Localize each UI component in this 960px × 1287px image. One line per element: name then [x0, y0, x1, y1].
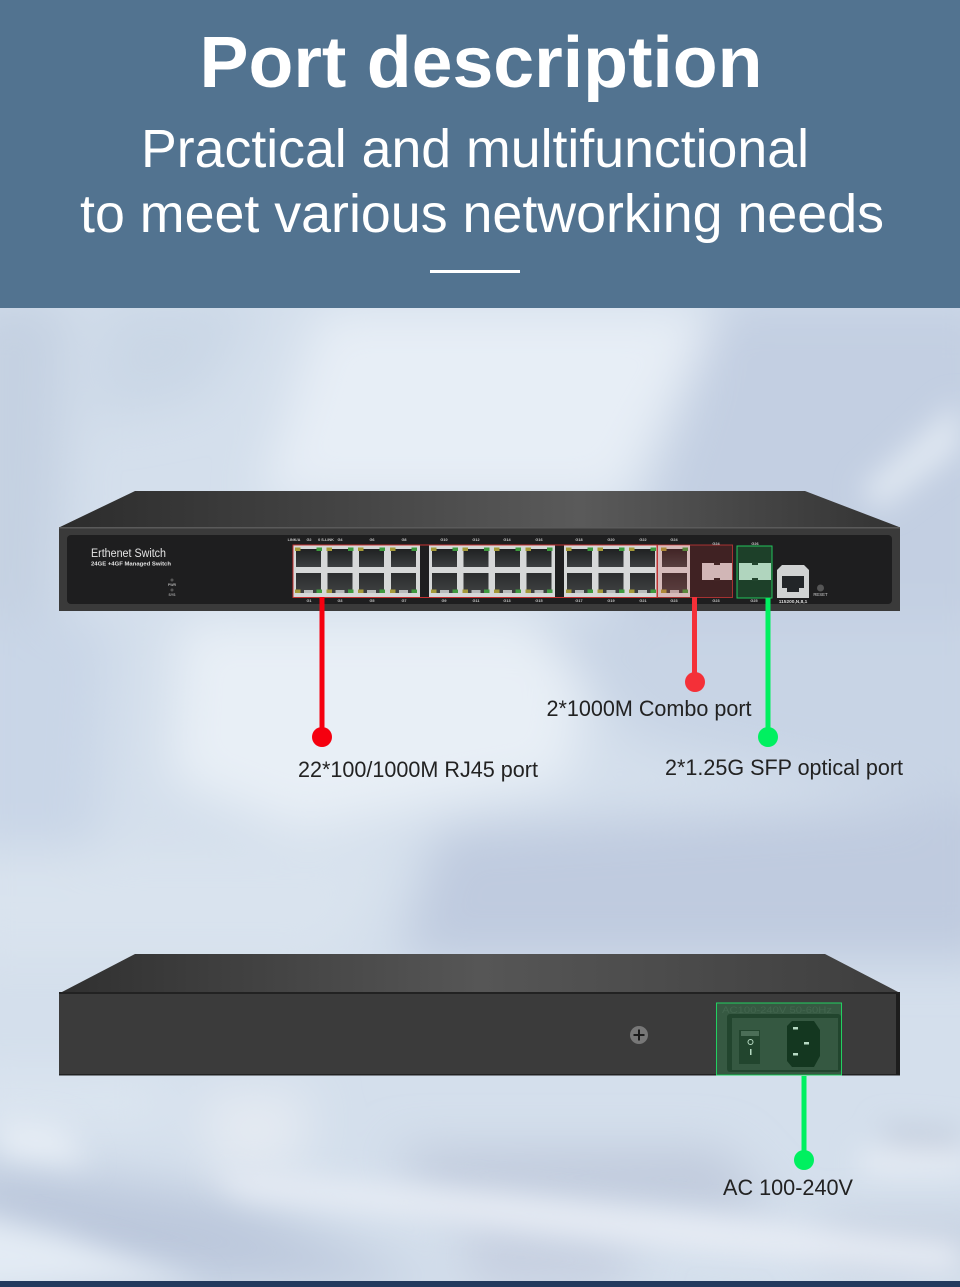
- port number labels: G4: [337, 538, 343, 542]
- callout: AC power: AC 100-240V: [723, 1175, 853, 1200]
- header divider: [430, 270, 520, 273]
- callout: AC power: [723, 1076, 853, 1200]
- port number labels: G8: [401, 538, 407, 542]
- reset button: RESET: [813, 592, 828, 597]
- background: pale cloud sky: [0, 300, 960, 1287]
- reset button: [813, 584, 828, 597]
- switch top face: [60, 491, 899, 527]
- callout: RJ45 ports: 22*100/1000M RJ45 port: [298, 757, 538, 782]
- port number labels: G14: [503, 538, 511, 542]
- status LEDs: SYS: [168, 593, 176, 597]
- port number labels: G10: [440, 538, 448, 542]
- callout: SFP optical port: 2*1.25G SFP optical port: [665, 755, 903, 780]
- port number labels: G24: [712, 542, 720, 546]
- status LEDs: PWR: [168, 583, 177, 587]
- port number labels: G15: [535, 599, 543, 603]
- status LEDs: [168, 578, 177, 597]
- port number labels: G5: [369, 599, 375, 603]
- power green overlay: [716, 1003, 842, 1075]
- port number labels: 0 S-LINK: [318, 538, 334, 542]
- subtitle: to meet various networking needs: [80, 184, 884, 244]
- subtitle: Practical and multifunctional: [141, 119, 809, 179]
- port number labels: G23: [712, 599, 720, 603]
- port number labels: G16: [535, 538, 543, 542]
- port number labels: G11: [473, 599, 479, 603]
- front view of switch: [59, 491, 900, 611]
- brand text: [91, 548, 171, 568]
- bottom band: [0, 1281, 960, 1287]
- SFP optical ports: [738, 546, 772, 598]
- combo RJ45 ports: [658, 545, 690, 597]
- port number labels: G3: [337, 599, 343, 603]
- port number labels: G1: [306, 599, 312, 603]
- rear top face: [60, 954, 900, 993]
- port number labels: G21: [639, 599, 647, 603]
- port number labels: G9: [441, 599, 447, 603]
- front inner panel: [67, 535, 892, 604]
- port number labels: G7: [401, 599, 407, 603]
- port number labels: G26: [751, 542, 759, 546]
- brand text: 24GE +4GF Managed Switch: [91, 562, 171, 568]
- power switch: [739, 1030, 760, 1064]
- port number labels: G22: [639, 538, 647, 542]
- combo red overlay: [658, 545, 732, 598]
- switch front face: [59, 527, 900, 611]
- combo SFP ports: [690, 545, 733, 597]
- callout: combo port: 2*1000M Combo port: [546, 696, 752, 721]
- power module: [727, 1014, 841, 1072]
- port number labels: G19: [607, 599, 615, 603]
- port number labels: G25: [750, 599, 758, 603]
- port number labels: G17: [575, 599, 583, 603]
- port number labels: G18: [575, 538, 583, 542]
- ground screw: [630, 1026, 648, 1044]
- port number labels: G23: [670, 599, 678, 603]
- port number labels: G13: [503, 599, 511, 603]
- port number labels: G2: [306, 538, 312, 542]
- console port: 115200,N,8,1: [779, 599, 808, 605]
- callout: combo port: [546, 597, 752, 721]
- rear face: [59, 993, 900, 1075]
- title: Port description: [200, 23, 762, 103]
- port number labels: G12: [472, 538, 480, 542]
- callout: SFP optical port: [665, 598, 903, 780]
- red outline around RJ45 ports: [293, 545, 657, 598]
- port number labels: G6: [369, 538, 375, 542]
- brand text: Erthenet Switch: [91, 548, 166, 560]
- header band: [0, 0, 960, 308]
- rating text: AC100-240V 50-60Hz: [722, 1005, 833, 1015]
- rear view of switch: [59, 954, 900, 1076]
- RJ45 port block 3: [564, 545, 657, 597]
- console port: [777, 565, 809, 605]
- subtitle: [80, 119, 884, 244]
- RJ45 port block 1: [293, 545, 420, 597]
- port number labels: G24: [670, 538, 678, 542]
- power socket: [787, 1021, 820, 1067]
- RJ45 port block 2: [429, 545, 555, 597]
- port number labels: LINK/A: [288, 538, 301, 542]
- SFP green overlay: [737, 546, 772, 598]
- port number labels: [288, 538, 759, 603]
- callout: RJ45 ports: [298, 597, 538, 782]
- port number labels: G20: [607, 538, 615, 542]
